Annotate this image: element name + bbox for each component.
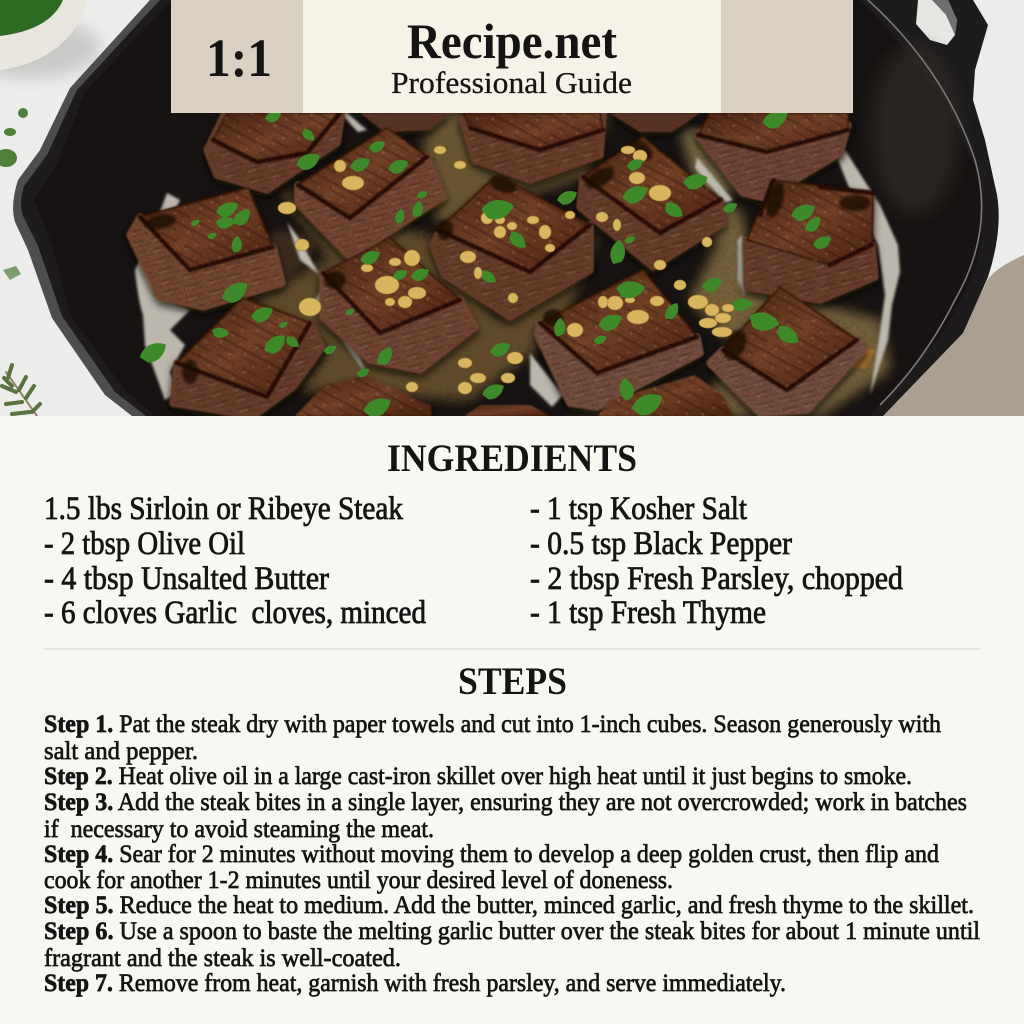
skillet inner floor bbox=[34, 0, 982, 416]
step 1: salt and pepper. bbox=[44, 736, 198, 765]
step 6 bbox=[44, 916, 980, 972]
steak bite top left bbox=[207, 113, 342, 190]
steak bite lower right bbox=[710, 287, 863, 413]
skillet inner sheen bbox=[870, 45, 960, 215]
ingredients left column: - 4 tbsp Unsalted Butter bbox=[44, 561, 329, 597]
browned butter and crumbs bbox=[252, 113, 896, 416]
skillet silhouette bbox=[17, 0, 999, 416]
steak bite top centre bbox=[463, 113, 603, 180]
steak bite top right bbox=[698, 113, 848, 198]
step 3: if necessary to avoid steaming the meat. bbox=[44, 814, 434, 843]
garlic pieces bbox=[278, 146, 734, 394]
steak bite bottom right bbox=[598, 375, 732, 416]
steak bite left bbox=[130, 188, 282, 307]
ingredients left column: 1.5 lbs Sirloin or Ribeye Steak bbox=[44, 491, 403, 527]
icon: herb bowl bbox=[0, 0, 100, 78]
steak bite far right bbox=[747, 180, 875, 300]
photo: steak bites in cast-iron skillet bbox=[0, 0, 1024, 417]
steak bites bbox=[130, 113, 875, 416]
right rim highlight line bbox=[868, 0, 982, 405]
step 7: Step 7. Remove from heat, garnish with fresh parsley, and serve immediately. bbox=[44, 968, 786, 997]
banner right panel bbox=[721, 0, 853, 113]
ingredients right column: - 2 tbsp Fresh Parsley, chopped bbox=[530, 561, 903, 597]
linen towel bbox=[880, 255, 1024, 416]
steak bite centre right bbox=[580, 137, 723, 267]
steps section bbox=[44, 660, 980, 997]
steak bite lower centre-right bbox=[538, 270, 700, 407]
steak bite middle bbox=[323, 238, 475, 370]
banner left panel bbox=[171, 0, 303, 113]
header banner bbox=[171, 0, 853, 113]
steak bite back right bbox=[610, 113, 700, 132]
ingredients right column: - 1 tsp Fresh Thyme bbox=[530, 595, 766, 631]
oil highlights bbox=[135, 113, 900, 407]
step 5: Step 5. Reduce the heat to medium. Add the butter, minced garlic, and fresh thyme to the skillet. bbox=[44, 890, 974, 919]
scattered herbs on counter bbox=[0, 108, 28, 280]
subtitle: Professional Guide bbox=[391, 65, 632, 100]
banner centre panel bbox=[303, 0, 721, 113]
sear char patches bbox=[143, 135, 871, 384]
ingredients left column: - 2 tbsp Olive Oil bbox=[44, 526, 245, 562]
step 2: Step 2. Heat olive oil in a large cast-iron skillet over high heat until it just begins to smoke. bbox=[44, 761, 912, 790]
step 3 bbox=[44, 787, 967, 843]
step 3: Step 3. Add the steak bites in a single layer, ensuring they are not overcrowded; work in batches bbox=[44, 787, 967, 816]
ingredients right column: - 1 tsp Kosher Salt bbox=[530, 491, 747, 527]
handle opening bbox=[916, 0, 957, 45]
step 6: fragrant and the steak is well-coated. bbox=[44, 943, 401, 972]
steak bite centre bbox=[433, 175, 590, 317]
ingredients left column bbox=[44, 491, 426, 631]
heading: ingredients: INGREDIENTS bbox=[387, 437, 637, 480]
left rim highlight bbox=[13, 0, 160, 416]
ingredients right column: - 0.5 tsp Black Pepper bbox=[530, 526, 792, 562]
step 1 bbox=[44, 709, 941, 765]
steak bite bottom centre bbox=[465, 405, 550, 416]
step 6: Step 6. Use a spoon to baste the melting garlic butter over the steak bites for about 1 minute until bbox=[44, 916, 980, 945]
ingredients section bbox=[44, 437, 903, 631]
steak bite bottom left bbox=[295, 376, 432, 416]
steak bite centre left bbox=[298, 128, 443, 257]
parsley leaves bbox=[139, 111, 831, 417]
step 4: cook for another 1-2 minutes until your desired level of doneness. bbox=[44, 865, 673, 894]
step 4 bbox=[44, 839, 939, 894]
step 4: Step 4. Sear for 2 minutes without moving them to develop a deep golden crust, then flip and bbox=[44, 839, 939, 868]
steak bite back left bbox=[360, 113, 450, 132]
handle slot shade bbox=[932, 0, 957, 35]
ratio label: 1:1 bbox=[206, 28, 272, 88]
ingredients left column: - 6 cloves Garlic cloves, minced bbox=[44, 595, 426, 631]
step 1: Step 1. Pat the steak dry with paper towels and cut into 1-inch cubes. Season generously with bbox=[44, 709, 941, 738]
brand title: Recipe.net bbox=[407, 13, 617, 69]
marble counter bbox=[0, 0, 1024, 416]
steak bite lower left bbox=[173, 298, 322, 416]
thyme sprig bbox=[2, 365, 40, 416]
ingredients right column bbox=[530, 491, 903, 631]
heading: steps: STEPS bbox=[458, 660, 567, 703]
